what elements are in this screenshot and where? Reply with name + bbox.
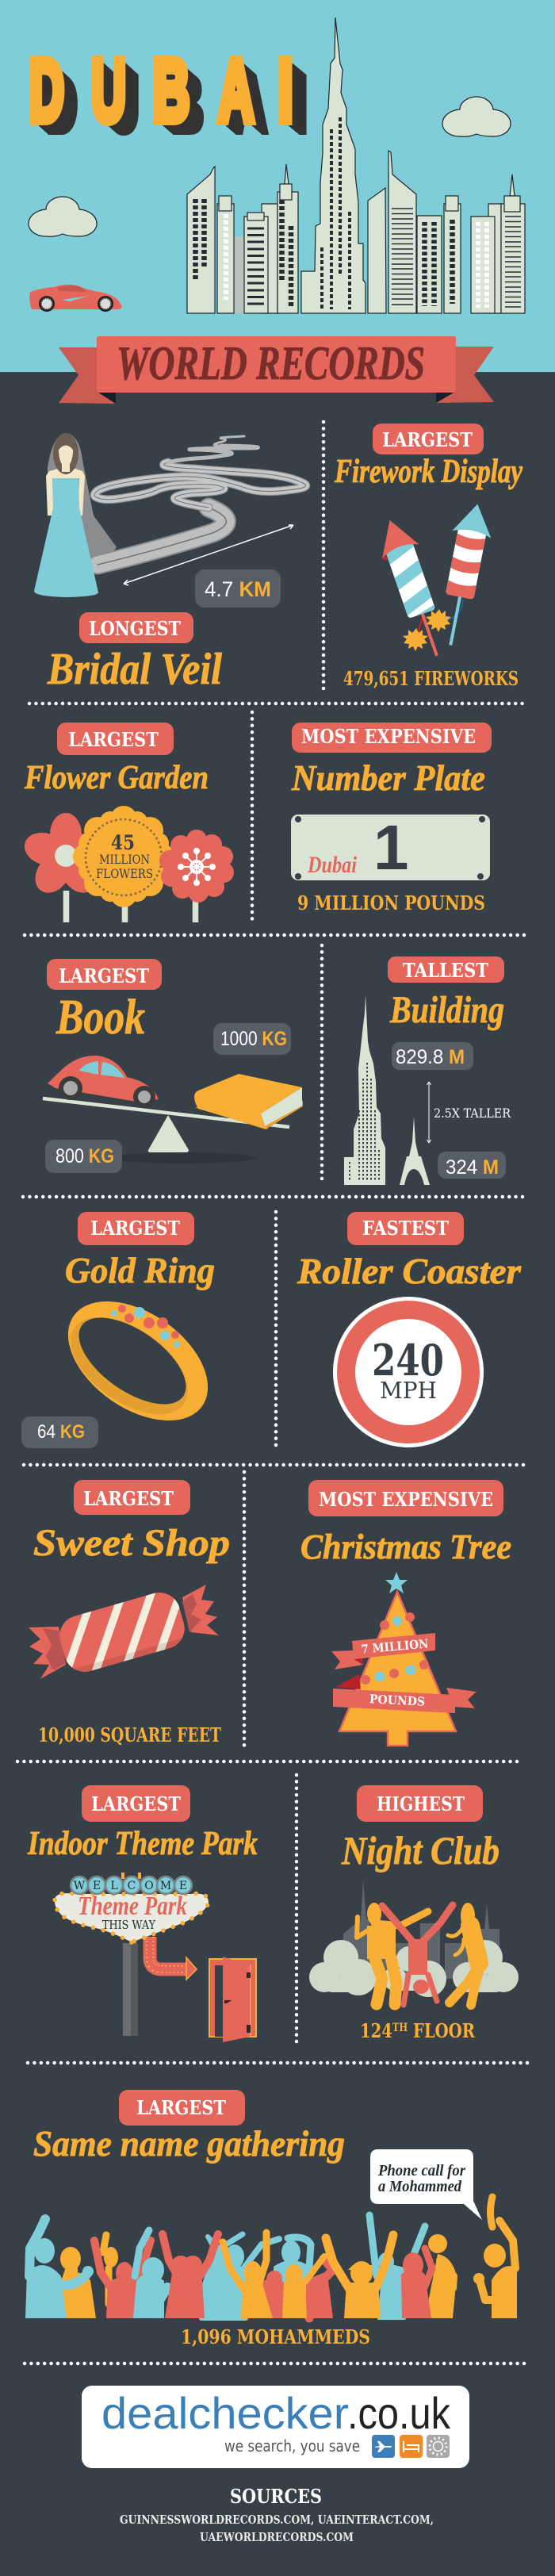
crowd: person five <box>163 2234 218 2318</box>
panel: highest night club <box>309 1785 519 2042</box>
text: 45 million flowers: 45 <box>111 831 135 854</box>
icon: number plate <box>291 812 490 883</box>
value: 324 m <box>438 1152 506 1179</box>
panel: christmas tree <box>300 1480 511 1746</box>
crowd: person one and two <box>25 2219 96 2318</box>
icon: holidays <box>427 2435 450 2458</box>
icon: cloud left <box>29 197 97 236</box>
text: 2.5x taller: 2.5X TALLER <box>434 1106 511 1121</box>
text: 45 million flowers <box>96 831 153 881</box>
value: 64 kg: 64 KG <box>37 1421 85 1443</box>
heading: number plate: Number Plate <box>291 757 485 798</box>
label: largest: LARGEST <box>83 1487 174 1510</box>
icon: christmas tree <box>331 1572 477 1746</box>
icon: door <box>209 1957 256 2042</box>
panel: roller coaster <box>297 1212 522 1447</box>
panel: largest book <box>43 959 303 1173</box>
stat: price: 9 MILLION POUNDS <box>297 891 485 914</box>
value: 1000 kg <box>213 1023 291 1055</box>
comparison arrow <box>427 1082 431 1143</box>
crowd: person twelve <box>326 2235 393 2318</box>
label: largest: LARGEST <box>136 2096 226 2119</box>
value: 64 kg <box>21 1416 98 1448</box>
title: Dubai: A <box>218 42 254 140</box>
icon: dancers over city <box>309 1880 519 2005</box>
panel: gold ring <box>21 1212 230 1448</box>
heading: sweet shop: Sweet Shop <box>33 1522 230 1564</box>
crowd: person three and four <box>94 2230 173 2318</box>
panel: number plate <box>291 723 492 914</box>
label: highest <box>357 1785 483 1822</box>
icon: vegas sign: Theme Park <box>78 1892 187 1921</box>
heading: christmas tree: Christmas Tree <box>300 1528 511 1566</box>
speech bubble: a Mohammed <box>378 2178 462 2195</box>
logo: dealchecker: dealchecker <box>101 2388 349 2438</box>
label: largest <box>82 1785 190 1822</box>
heading: world records: WORLD RECORDS <box>117 337 425 389</box>
icon: hotels <box>400 2435 423 2458</box>
title: Dubai: D <box>29 42 64 140</box>
text: 45 million flowers: MILLION <box>99 852 150 867</box>
stat: 124th floor: 124 <box>360 2019 400 2042</box>
label: longest <box>79 612 193 643</box>
icon: vegas sign: O <box>144 1880 154 1892</box>
icon: christmas tree: 7 MILLION <box>361 1636 429 1657</box>
speech bubble <box>370 2149 482 2220</box>
label: largest <box>78 1212 194 1245</box>
skyline buildings <box>187 17 525 313</box>
icon: candy <box>29 1580 219 1684</box>
icon: vegas sign: W <box>74 1880 86 1892</box>
label: most expensive <box>308 1480 503 1516</box>
heading: indoor theme park: Indoor Theme Park <box>27 1826 258 1862</box>
crowd: person with phone <box>473 2197 517 2318</box>
sources: UAEWORLDRECORDS.COM <box>200 2530 354 2544</box>
icon: sports car <box>29 285 122 312</box>
icon: cloud right <box>442 97 511 136</box>
label: most expensive: MOST EXPENSIVE <box>319 1488 493 1511</box>
icon: bride and veil <box>34 433 306 597</box>
label: largest <box>74 1480 190 1515</box>
text: 45 million flowers: FLOWERS <box>96 866 153 881</box>
icon: burj khalifa <box>344 995 385 1185</box>
label: tallest: TALLEST <box>403 959 488 982</box>
icon: big book <box>194 1074 303 1129</box>
crowd: back row <box>103 2215 457 2318</box>
crowd: person seven and nine <box>223 2233 284 2318</box>
heading: bridal veil: Bridal Veil <box>47 645 222 694</box>
label: longest: LONGEST <box>89 617 181 640</box>
label: largest: LARGEST <box>68 728 159 751</box>
panel: sweet shop <box>29 1480 230 1746</box>
icon: vegas sign: C <box>128 1880 136 1892</box>
value: 324 m: 324 M <box>446 1156 499 1179</box>
label: largest: LARGEST <box>91 1792 181 1815</box>
icon: christmas tree: POUNDS <box>369 1692 425 1709</box>
icon: beetle car <box>48 1056 159 1108</box>
label: largest <box>373 424 484 454</box>
label: largest: LARGEST <box>59 964 149 987</box>
title: Dubai <box>29 42 307 140</box>
icon: speed sign: 240 <box>372 1335 444 1386</box>
measure arrow <box>124 525 293 585</box>
icon: number plate: Dubai <box>307 852 358 878</box>
title: Dubai: U <box>91 42 126 140</box>
panel: indoor theme park <box>27 1785 258 2042</box>
icon: number plate: 1 <box>373 812 409 883</box>
panel: firework display <box>334 424 522 690</box>
sources: GUINNESSWORLDRECORDS.COM, UAEINTERACT.COM, <box>120 2513 434 2527</box>
title: Dubai: B <box>153 42 189 140</box>
icon: gold ring <box>46 1277 230 1445</box>
logo: dealchecker <box>82 2386 469 2468</box>
value: 800 kg: 800 KG <box>56 1145 114 1167</box>
icon: vegas sign: E <box>179 1880 187 1892</box>
icon: scale with car and book <box>43 1056 303 1163</box>
icon: vegas sign: E <box>93 1880 101 1892</box>
label: highest: HIGHEST <box>377 1792 465 1815</box>
heading: flower garden: Flower Garden <box>24 760 209 796</box>
heading: gold ring: Gold Ring <box>65 1250 215 1290</box>
speech bubble: Phone call for <box>377 2162 465 2179</box>
icon: fireworks rockets <box>382 504 492 657</box>
crowd silhouettes <box>25 2197 517 2318</box>
icon: eiffel tower <box>400 1117 430 1185</box>
crowd: person ten <box>282 2256 324 2318</box>
panel: flower garden <box>20 723 234 922</box>
label: fastest <box>347 1212 464 1245</box>
heading: building: Building <box>389 989 504 1031</box>
panel: tallest building <box>344 956 511 1185</box>
heading: night club: Night Club <box>341 1828 500 1873</box>
panel: same name gathering <box>25 2090 517 2348</box>
icon: vegas sign <box>55 1873 209 2036</box>
stat: 124th floor: FLOOR <box>408 2019 476 2042</box>
label: largest <box>57 723 174 755</box>
heading: book: Book <box>56 991 145 1045</box>
label: largest <box>119 2090 245 2126</box>
value: 800 kg <box>45 1140 122 1173</box>
label: largest: LARGEST <box>382 428 473 451</box>
panel: sky header <box>0 0 555 372</box>
icon: speed sign <box>333 1297 484 1447</box>
panel: bridal veil <box>34 433 306 694</box>
icon: speed sign: MPH <box>380 1377 437 1404</box>
value: 829.8 m <box>392 1042 473 1070</box>
label: most expensive: MOST EXPENSIVE <box>301 725 476 748</box>
sources <box>120 2485 434 2544</box>
title: Dubai: I <box>278 42 293 140</box>
stat: square feet: 10,000 SQUARE FEET <box>38 1723 221 1746</box>
value: 4.7 KM <box>195 569 281 608</box>
stat: 1,096 mohammeds: 1,096 MOHAMMEDS <box>181 2325 370 2348</box>
value: 829.8 m: 829.8 M <box>396 1046 465 1068</box>
icon: flights <box>372 2435 395 2458</box>
stat: 124th floor: TH <box>392 2022 408 2034</box>
icon: flowers <box>20 806 234 922</box>
icon: vegas sign: L <box>110 1880 118 1892</box>
label: largest <box>47 959 162 990</box>
icon: vegas sign: THIS WAY <box>102 1918 156 1932</box>
logo: dealchecker: we search, you save <box>224 2436 360 2455</box>
value: 4.7 KM: 4.7 KM <box>205 577 271 601</box>
sources: SOURCES <box>230 2485 322 2508</box>
value: 1000 kg: 1000 KG <box>220 1028 287 1050</box>
icon: vegas sign: M <box>160 1880 171 1892</box>
heading: same name gathering: Same name gathering <box>33 2123 345 2164</box>
label: fastest: FASTEST <box>362 1217 449 1240</box>
logo: dealchecker: .co.uk <box>347 2388 451 2438</box>
label: largest: LARGEST <box>90 1217 180 1240</box>
banner: world records <box>59 336 494 404</box>
heading: roller coaster: Roller Coaster <box>297 1251 522 1291</box>
